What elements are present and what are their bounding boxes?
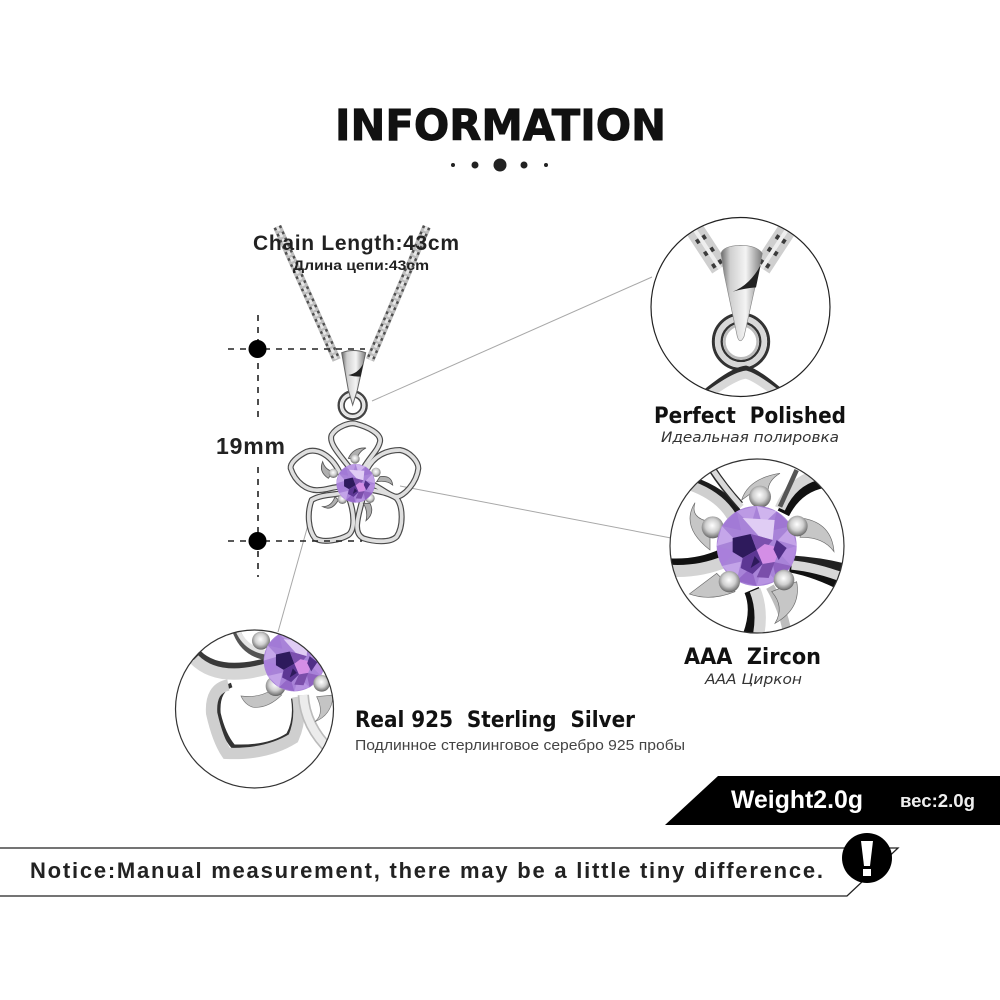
weight banner bbox=[665, 776, 1000, 825]
zircon prong tips bbox=[719, 516, 808, 592]
feature label: silver: Подлинное стерлинговое серебро 925 пробы bbox=[355, 737, 685, 754]
zircon claws bbox=[689, 473, 834, 623]
detail ring bbox=[713, 314, 769, 369]
dimension label: 19mm bbox=[216, 433, 285, 459]
detail circle: polished bail bbox=[651, 218, 830, 399]
dimension guides bbox=[228, 315, 365, 577]
chain length label: Chain Length:43cm bbox=[253, 232, 459, 255]
feature label: polished bbox=[654, 404, 846, 446]
feature label: zircon bbox=[684, 645, 821, 688]
claws bbox=[321, 448, 393, 521]
detail petal bbox=[703, 371, 783, 397]
icon: exclamation badge bbox=[842, 833, 892, 883]
feature label: zircon: ААА Циркон bbox=[704, 672, 802, 688]
flower petals bbox=[291, 423, 418, 541]
feature label: zircon: AAA Zircon bbox=[684, 645, 821, 670]
silver gem bbox=[264, 630, 325, 691]
detail bail bbox=[721, 245, 762, 341]
feature label: polished: Идеальная полировка bbox=[661, 430, 839, 446]
gem bbox=[336, 464, 375, 503]
chain length label: Длина цепи:43cm bbox=[293, 257, 429, 273]
feature label: silver bbox=[355, 708, 685, 754]
leader lines bbox=[278, 277, 671, 632]
weight banner: Weight2.0g bbox=[731, 786, 863, 814]
detail circle: silver bbox=[176, 630, 334, 788]
notice banner bbox=[0, 848, 898, 896]
silver prongs bbox=[252, 632, 286, 696]
chain length label bbox=[253, 232, 459, 273]
circle outline bbox=[176, 630, 334, 788]
zircon gem bbox=[717, 506, 797, 586]
feature label: silver: Real 925 Sterling Silver bbox=[355, 708, 635, 733]
silver claws bbox=[241, 690, 333, 722]
title dots bbox=[451, 158, 548, 172]
ring bbox=[339, 391, 367, 419]
zircon prongs bbox=[702, 486, 771, 538]
prongs bbox=[329, 454, 381, 504]
title: INFORMATION bbox=[335, 101, 666, 151]
silver petal bands bbox=[194, 632, 332, 753]
circle outline bbox=[651, 218, 830, 396]
detail chain bbox=[692, 225, 790, 268]
bail bbox=[342, 350, 366, 405]
notice banner: Notice:Manual measurement, there may be a little tiny difference. bbox=[30, 858, 823, 883]
chain bbox=[277, 227, 427, 360]
detail circle: zircon bbox=[668, 459, 847, 637]
spiral bands bbox=[668, 468, 847, 637]
weight banner: вес:2.0g bbox=[900, 791, 975, 811]
pendant necklace bbox=[277, 227, 427, 541]
dimension markers bbox=[248, 340, 266, 550]
feature label: polished: Perfect Polished bbox=[654, 404, 846, 429]
circle outline bbox=[670, 459, 844, 633]
